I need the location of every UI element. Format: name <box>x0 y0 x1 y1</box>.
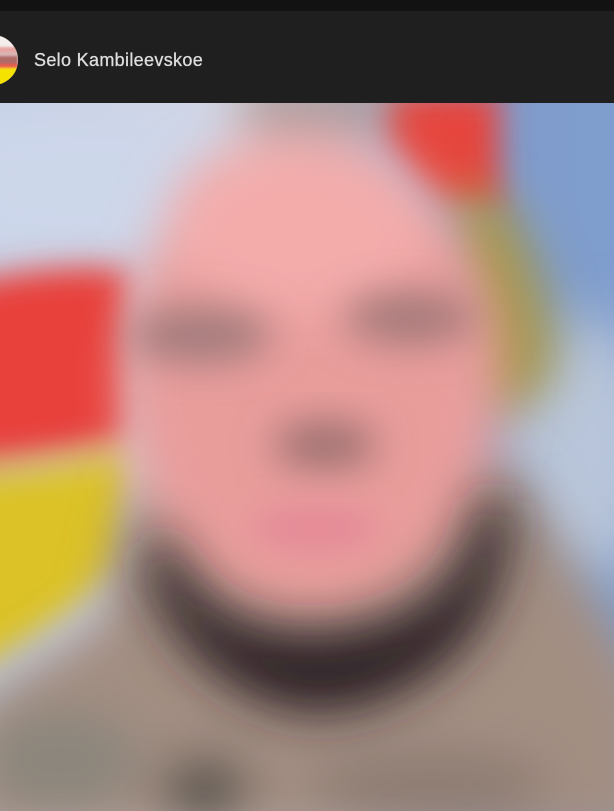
head and face <box>122 85 502 615</box>
lips <box>250 504 380 552</box>
channel name: Selo Kambileevskoe <box>34 50 203 70</box>
flag: red and olive patches on the right <box>380 90 500 215</box>
jacket <box>0 460 614 811</box>
status bar <box>0 0 614 11</box>
nose shadow <box>273 421 377 469</box>
beard <box>145 495 510 713</box>
header bar <box>0 11 614 103</box>
flag: red and yellow stripes on the left <box>0 267 130 680</box>
icon: profile avatar with flag <box>0 36 18 84</box>
eyes and glasses <box>128 292 476 363</box>
